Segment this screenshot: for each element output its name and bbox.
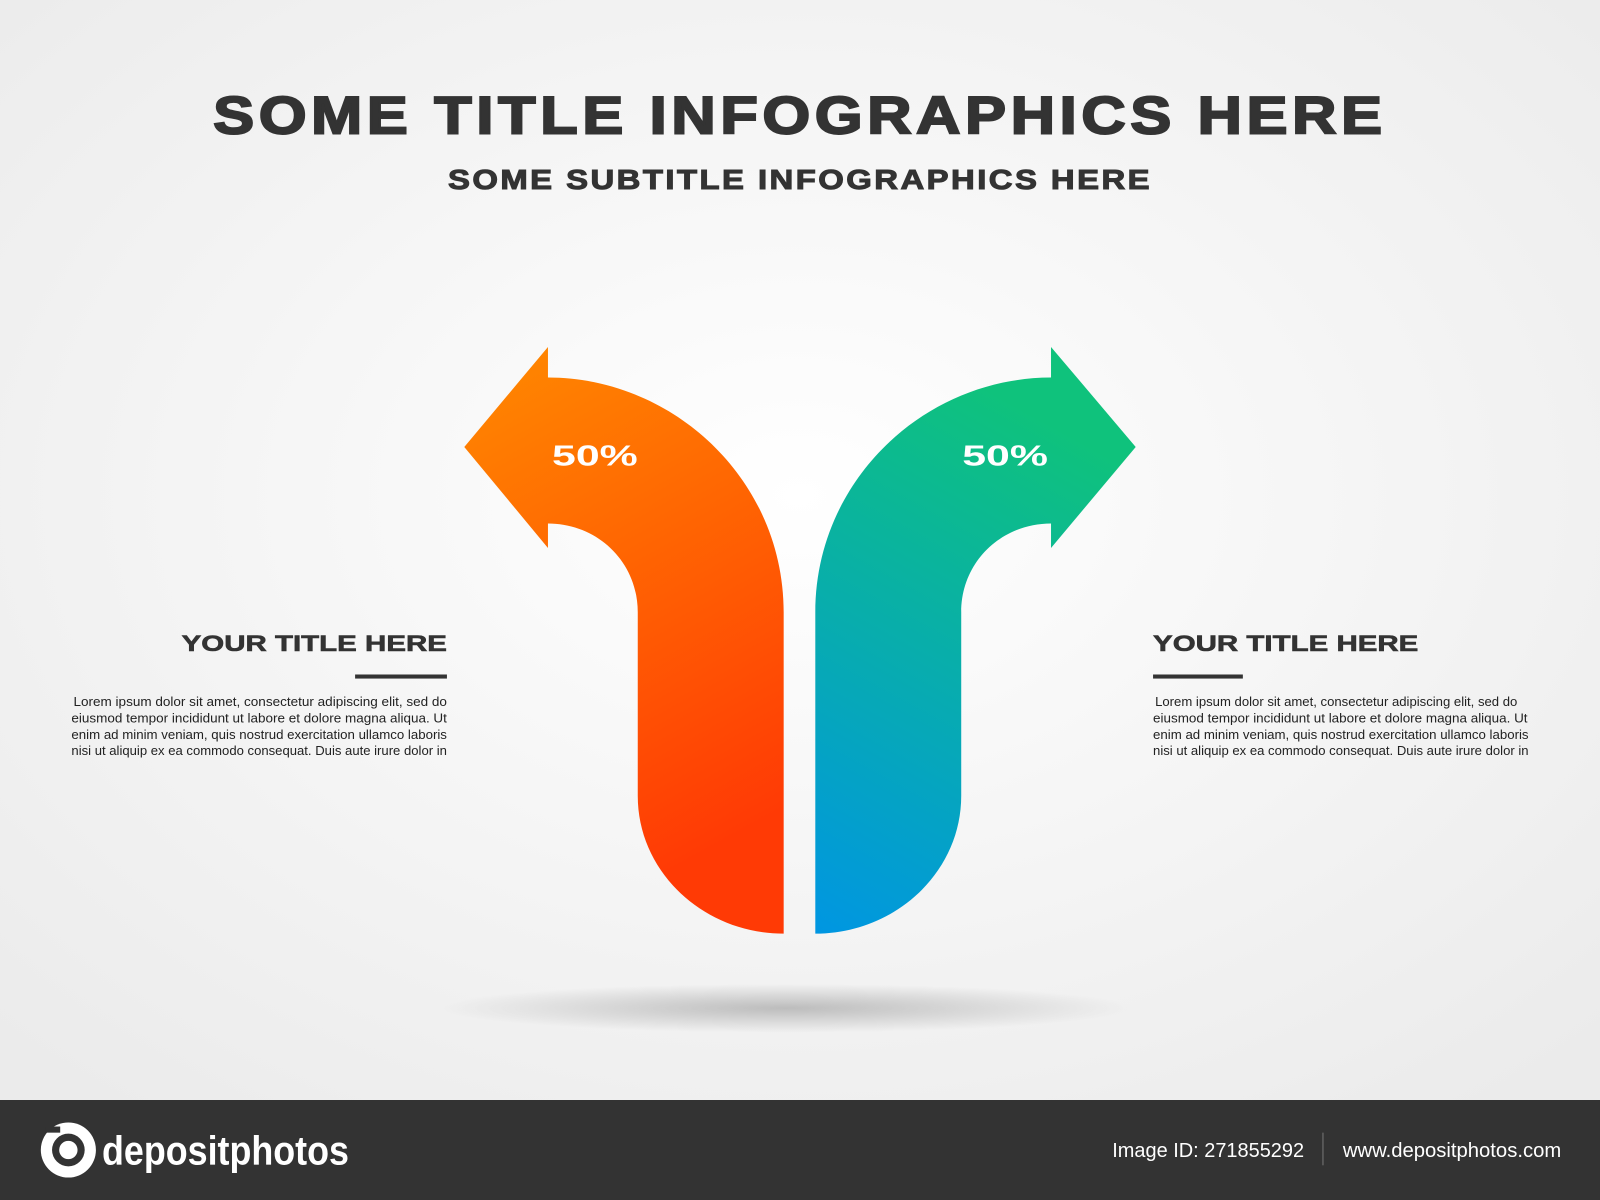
footer url: www.depositphotos.com <box>1342 1140 1561 1162</box>
text block: left: YOUR TITLE HERE <box>182 631 447 656</box>
footer bar <box>0 1100 1600 1200</box>
arrow: right green <box>815 347 1136 934</box>
label: left percent: 50% <box>552 440 638 472</box>
label: right percent: 50% <box>962 440 1048 472</box>
text block: right: enim ad minim veniam, quis nostrud exercitation ullamco laboris <box>1153 727 1529 742</box>
text block: right: Lorem ipsum dolor sit amet, consectetur adipiscing elit, sed do <box>1155 694 1517 709</box>
text block: right <box>1153 631 1529 758</box>
text block: right: eiusmod tempor incididunt ut labore et dolore magna aliqua. Ut <box>1153 710 1528 725</box>
footer image id: Image ID: 271855292 <box>1112 1140 1304 1162</box>
subtitle: SOME SUBTITLE INFOGRAPHICS HERE <box>448 164 1152 195</box>
text block: left: Lorem ipsum dolor sit amet, consectetur adipiscing elit, sed do <box>73 694 447 709</box>
text block: left: enim ad minim veniam, quis nostrud exercitation ullamco laboris <box>71 727 447 742</box>
text block: right: nisi ut aliquip ex ea commodo consequat. Duis aute irure dolor in <box>1153 743 1529 758</box>
footer logo text: depositphotos <box>102 1127 349 1173</box>
arrow: left orange <box>464 347 784 934</box>
icon: camera logo <box>41 1122 96 1178</box>
text block: left: eiusmod tempor incididunt ut labore et dolore magna aliqua. Ut <box>71 710 447 725</box>
shadow <box>439 984 1133 1033</box>
text block: left <box>71 631 447 758</box>
title: SOME TITLE INFOGRAPHICS HERE <box>213 87 1387 146</box>
text block: left: nisi ut aliquip ex ea commodo consequat. Duis aute irure dolor in <box>71 743 447 758</box>
text block: right: YOUR TITLE HERE <box>1153 631 1418 656</box>
